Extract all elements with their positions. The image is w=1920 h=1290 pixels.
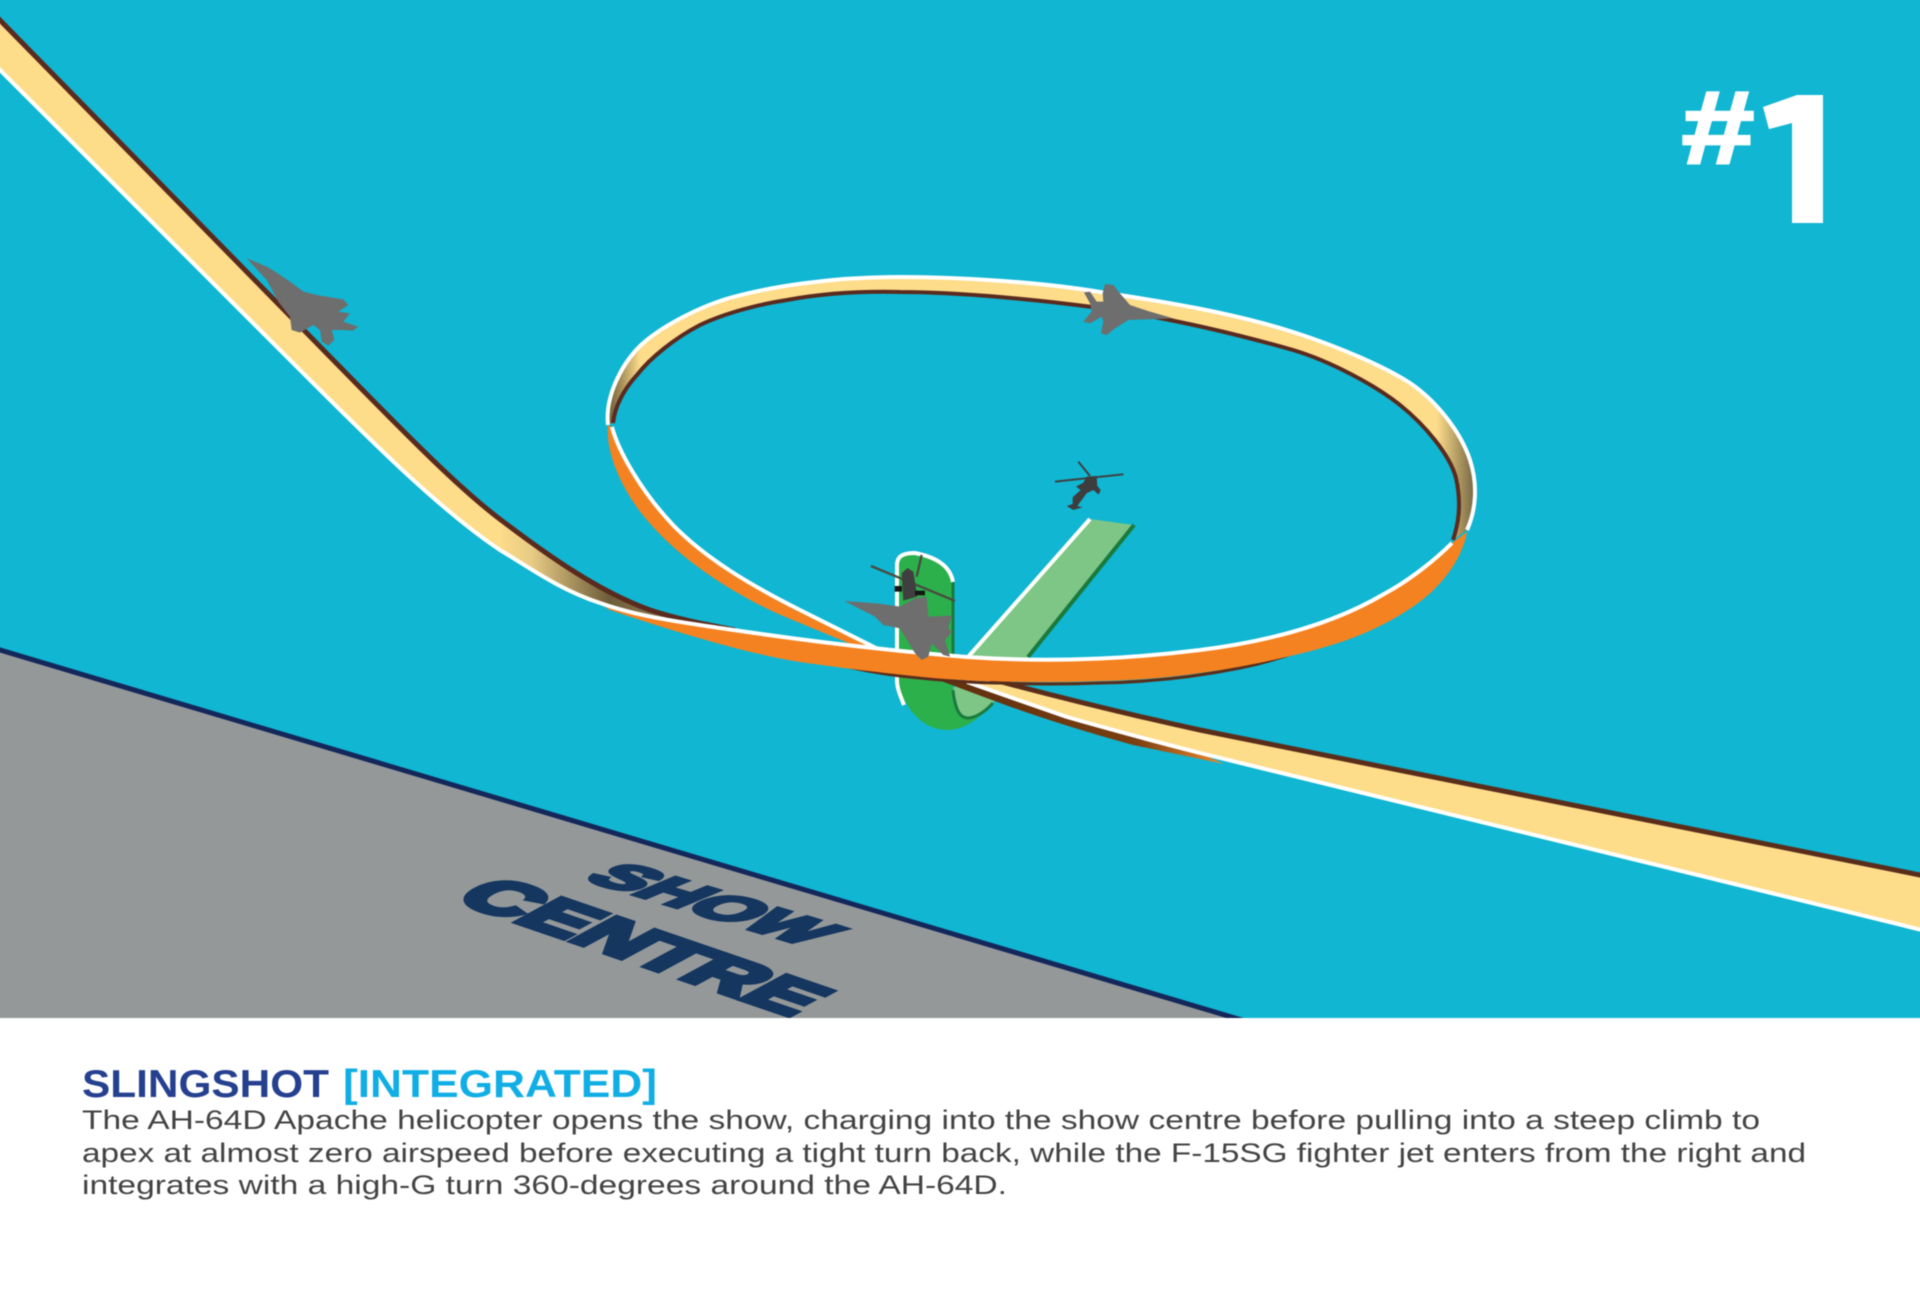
sky background (0, 0, 1920, 1018)
label: show: SHOW (569, 857, 860, 951)
description text: integrates with a high-G turn 360-degrees around the AH-64D. (82, 1170, 1007, 1200)
main orange band (600, 532, 1467, 684)
heading: manoeuvre name: [INTEGRATED] (343, 1063, 657, 1106)
manoeuvre number: # (1682, 70, 1754, 185)
description text (82, 1105, 1806, 1200)
label: centre: CENTRE (438, 869, 850, 1025)
caption panel (82, 1063, 1806, 1200)
loop ribbon upper section (608, 277, 1475, 540)
manoeuvre number (1682, 90, 1824, 224)
left orange strand of loop (608, 425, 880, 652)
heading: manoeuvre name (82, 1063, 657, 1106)
manoeuvre number: 1 (1752, 61, 1852, 261)
icon: F-15SG jet on entry (247, 258, 358, 346)
entry ribbon: F-15SG arrival (0, 10, 750, 632)
icon: F-15SG jet at show centre (844, 597, 952, 660)
exit ribbon: F-15SG departure (933, 672, 1920, 932)
description text: apex at almost zero airspeed before executing a tight turn back, while the F-15SG fighter jet enters from the right and (82, 1138, 1806, 1168)
ground: show centre area (0, 647, 1245, 1025)
green apache flight path (897, 519, 1134, 730)
icon: Apache helicopter at show centre (871, 555, 955, 601)
icon: Apache helicopter at apex (1055, 462, 1123, 510)
description text: The AH-64D Apache helicopter opens the show, charging into the show centre before pulling into a steep climb to (82, 1105, 1760, 1135)
icon: F-15SG jet on loop (1083, 284, 1173, 335)
heading: manoeuvre name: SLINGSHOT (82, 1063, 329, 1106)
